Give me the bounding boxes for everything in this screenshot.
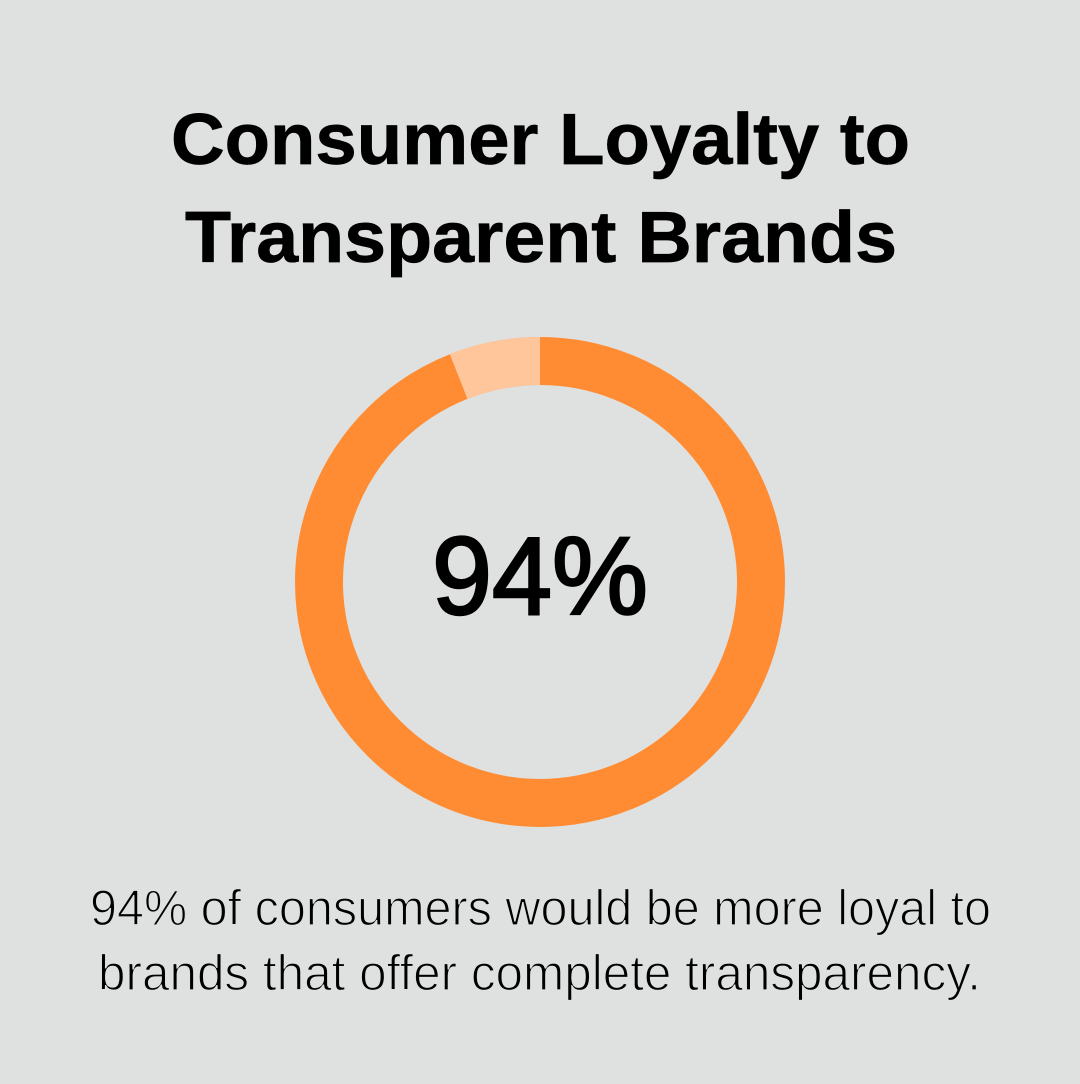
title: Consumer Loyalty to <box>171 100 910 180</box>
caption: 94% of consumers would be more loyal to <box>90 880 991 936</box>
caption <box>90 880 991 1001</box>
caption: brands that offer complete transparency. <box>98 945 981 1001</box>
title: Transparent Brands <box>185 198 897 278</box>
title <box>171 100 910 278</box>
remaining 6 percent segment <box>459 361 540 376</box>
center value: 94% <box>432 515 648 638</box>
donut chart: 94 percent <box>319 361 761 803</box>
